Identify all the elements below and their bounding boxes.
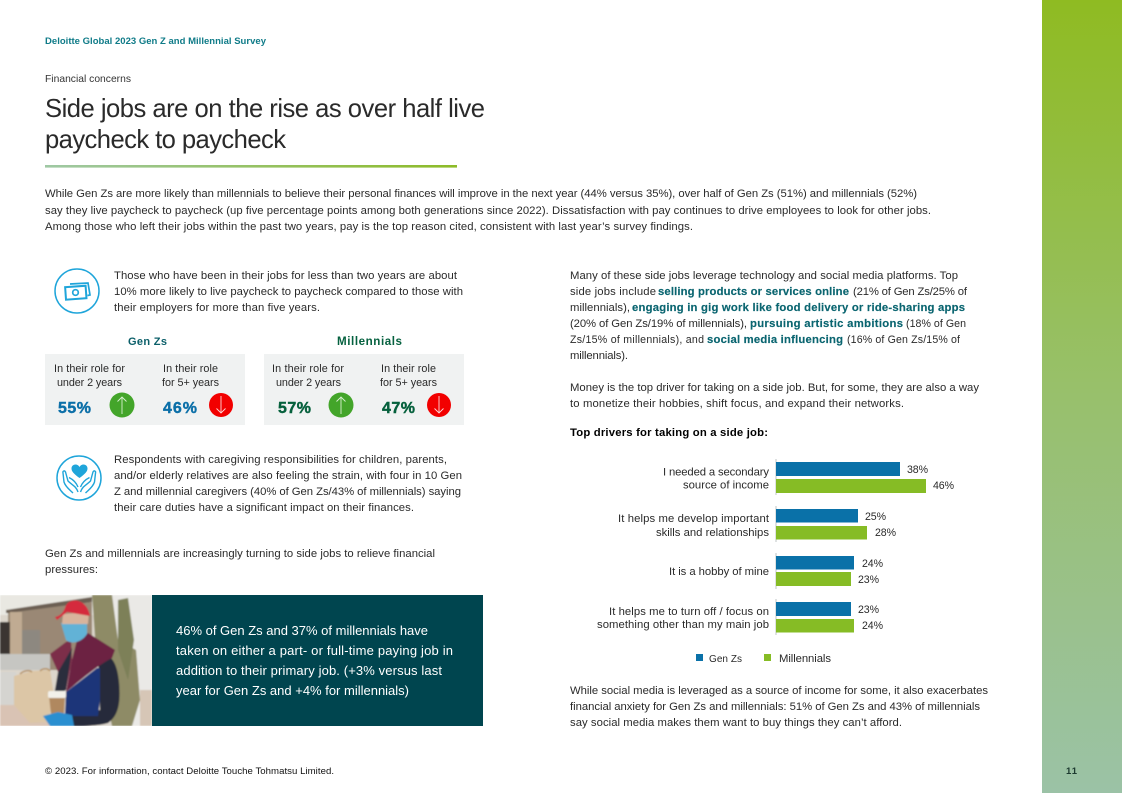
heading: Gen Zs: Gen Zs: [128, 336, 167, 348]
panel: Millennials: under 2 years: [276, 377, 342, 389]
heading: Millennials: Millennials: [337, 335, 402, 348]
side jobs lead-in text: [45, 548, 435, 576]
icon: money: [55, 269, 99, 313]
side jobs paragraph: Many of these side jobs leverage technology and social media platforms. Top: [570, 270, 958, 282]
running header: Deloitte Global 2023 Gen Z and Millennial Survey: [45, 36, 267, 47]
panel: Millennials: 47%: [382, 400, 415, 417]
green sidebar: [1042, 0, 1122, 793]
category: secondary income: 38%: [907, 464, 929, 476]
title: paycheck to paycheck: [45, 126, 286, 154]
caregiver text: Z and millennial caregivers (40% of Gen Zs/43% of millennials) saying: [114, 486, 461, 498]
social media paragraph: While social media is leveraged as a source of income for some, it also exacerbates: [570, 685, 988, 697]
panel: Millennials: 57%: [278, 400, 311, 417]
money driver paragraph: [570, 382, 979, 410]
mask: [61, 622, 87, 642]
intro paragraph: say they live paycheck to paycheck (up five percentage points among both generations since 2022). Dissatisfaction with pay continues to drive employees to look for other jobs.: [45, 205, 931, 217]
category: turn off or focus: It helps me to turn off / focus on: [609, 606, 769, 618]
intro paragraph: Among those who left their jobs within the past two years, pay is the top reason cited, consistent with last year’s survey findings.: [45, 221, 693, 233]
side jobs lead-in text: pressures:: [45, 564, 98, 576]
callout: side job statistic: 46% of Gen Zs and 37% of millennials have: [176, 623, 428, 638]
category: secondary income: [663, 462, 955, 493]
blue glove: [43, 712, 74, 726]
side jobs paragraph: side jobs include: [570, 286, 656, 298]
title: [45, 95, 485, 154]
red cap: [55, 600, 90, 620]
category: hobby: It is a hobby of mine: [669, 566, 769, 578]
panel: Millennials: [264, 354, 464, 425]
category: turn off or focus: [597, 602, 884, 632]
face: [62, 612, 89, 624]
panel: Millennials: In their role: [381, 363, 436, 375]
paycheck tenure text: [114, 270, 463, 314]
panel: Gen Zs: In their role for: [54, 363, 125, 375]
side jobs paragraph: millennials),: [570, 302, 630, 314]
section label: Financial concerns: [45, 74, 131, 85]
icon: heart in hands: [57, 456, 101, 500]
panel: Gen Zs: [45, 354, 245, 425]
category: secondary income: I needed a secondary: [663, 466, 769, 478]
category: skills and relationships: [618, 509, 897, 540]
side jobs paragraph: selling products or services online: [658, 286, 849, 298]
panel: Gen Zs: under 2 years: [57, 377, 123, 389]
side jobs paragraph: (18% of Gen: [906, 318, 966, 330]
category: secondary income: source of income: [683, 480, 769, 492]
panel: Gen Zs: for 5+ years: [162, 377, 220, 389]
chart heading: Top drivers for taking on a side job:: [570, 427, 768, 439]
photo background: [0, 614, 112, 726]
side jobs paragraph: (16% of Gen Zs/15% of: [847, 334, 960, 346]
side jobs paragraph: social media influencing: [707, 334, 843, 346]
caregiver text: [114, 454, 462, 514]
category: hobby: [669, 556, 884, 586]
category: turn off or focus: something other than my main job: [597, 619, 769, 631]
panel: Millennials: for 5+ years: [380, 377, 438, 389]
side jobs paragraph: (21% of Gen Zs/25% of: [853, 286, 968, 298]
category: skills and relationships: skills and relationships: [656, 527, 769, 539]
worker sleeve: [72, 652, 120, 726]
panel: Gen Zs: 55%: [58, 400, 91, 417]
side jobs paragraph: millennials).: [570, 350, 628, 362]
chart legend: [696, 653, 831, 665]
footer copyright: © 2023. For information, contact Deloitte Touche Tohmatsu Limited.: [45, 766, 334, 777]
paycheck tenure text: their employers for more than five years.: [114, 302, 320, 314]
panel: Millennials: In their role for: [272, 363, 344, 375]
money driver paragraph: Money is the top driver for taking on a side job. But, for some, they are also a way: [570, 382, 979, 394]
paycheck tenure text: Those who have been in their jobs for less than two years are about: [114, 270, 458, 282]
title underline: [45, 165, 457, 168]
caregiver text: and/or elderly relatives are also feeling the strain, with four in 10 Gen: [114, 470, 462, 482]
category: skills and relationships: It helps me develop important: [618, 513, 770, 525]
category: hobby: 24%: [862, 558, 884, 570]
chart legend: Millennials: [779, 653, 831, 665]
worker vest: [50, 640, 72, 690]
callout: side job statistic: [152, 595, 483, 726]
caregiver text: Respondents with caregiving responsibilities for children, parents,: [114, 454, 447, 466]
side jobs paragraph: (20% of Gen Zs/19% of millennials),: [570, 318, 747, 330]
callout: side job statistic: addition to their primary job. (+3% versus last: [176, 663, 442, 678]
callout: side job statistic: year for Gen Zs and +4% for millennials): [176, 683, 409, 698]
photo: delivery worker: [0, 595, 152, 726]
side jobs paragraph: Zs/15% of millennials), and: [570, 334, 704, 346]
social media paragraph: financial anxiety for Gen Zs and millennials: 51% of Gen Zs and 43% of millennials: [570, 701, 980, 713]
category: secondary income: 46%: [933, 480, 955, 492]
intro paragraph: While Gen Zs are more likely than millennials to believe their personal finances will improve in the next year (44% versus 35%), over half of Gen Zs (51%) and millennials (52%): [45, 188, 917, 200]
social media paragraph: say social media makes them want to buy things they can’t afford.: [570, 717, 902, 729]
category: skills and relationships: 25%: [865, 511, 887, 523]
money driver paragraph: to monetize their hobbies, shift focus, and expand their networks.: [570, 398, 904, 410]
social media paragraph: [570, 685, 988, 729]
page number: 11: [1066, 766, 1078, 777]
callout: side job statistic: taken on either a part- or full-time paying job in: [176, 643, 453, 658]
panel: Gen Zs: 46%: [163, 400, 197, 417]
title: Side jobs are on the rise as over half live: [45, 95, 485, 123]
category: turn off or focus: 23%: [858, 604, 880, 616]
category: turn off or focus: 24%: [862, 620, 884, 632]
paper bag: [14, 670, 54, 723]
paycheck tenure text: 10% more likely to live paycheck to paycheck compared to those with: [114, 286, 463, 298]
category: skills and relationships: 28%: [875, 527, 897, 539]
side jobs lead-in text: Gen Zs and millennials are increasingly turning to side jobs to relieve financial: [45, 548, 435, 560]
side jobs paragraph: [570, 270, 968, 362]
side jobs paragraph: engaging in gig work like food delivery or ride-sharing apps: [632, 302, 965, 314]
caregiver text: their care duties have a significant impact on their finances.: [114, 502, 414, 514]
intro paragraph: [45, 188, 931, 233]
bar chart: top drivers: [597, 459, 955, 635]
category: hobby: 23%: [858, 574, 880, 586]
chart legend: Gen Zs: [709, 654, 742, 665]
coffee cup: [49, 696, 65, 714]
side jobs paragraph: pursuing artistic ambitions: [750, 318, 903, 330]
panel: Gen Zs: In their role: [163, 363, 218, 375]
